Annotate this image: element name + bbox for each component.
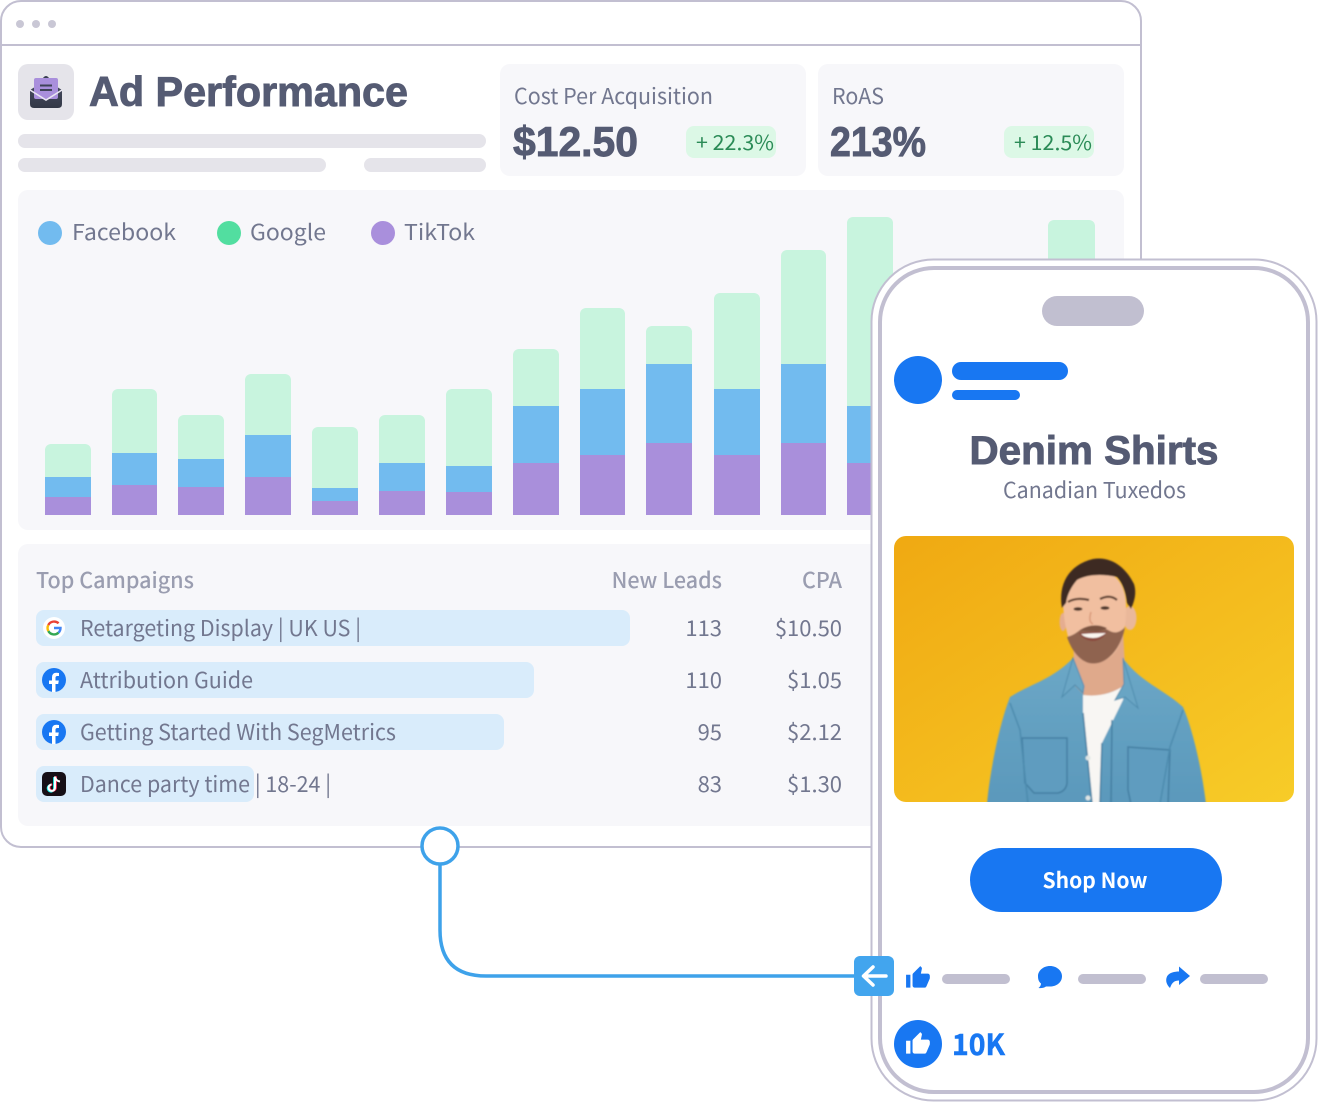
share placeholder [1200, 974, 1268, 984]
window controls [16, 20, 56, 28]
shop now button: Shop Now [1042, 865, 1148, 895]
icon: Facebook [42, 668, 66, 692]
t-shirt [1083, 685, 1125, 804]
like count badge [894, 1020, 1005, 1068]
panel: RoAS: + 12.5% [1014, 126, 1092, 156]
panel: cost per acquisition: Cost Per Acquisition [514, 79, 713, 111]
icon: Facebook [42, 720, 66, 744]
bars: Facebook [45, 364, 893, 501]
panel: cost per acquisition: $12.50 [513, 118, 638, 165]
icon: like [906, 966, 930, 988]
like count badge: 10K [952, 1022, 1005, 1064]
phone speaker pill [1042, 296, 1144, 326]
table header: Top Campaigns [36, 564, 194, 595]
title: Ad Performance [89, 68, 408, 115]
smile [1079, 632, 1107, 641]
row: Getting Started: 95 [698, 715, 722, 747]
icon: envelope [18, 64, 74, 120]
row: Getting Started: Getting Started With SegMetrics [80, 715, 396, 747]
ears [1124, 606, 1136, 630]
like placeholder [942, 974, 1010, 984]
ad account avatar and name lines [894, 356, 1068, 404]
table header: CPA [802, 564, 843, 595]
row: Attribution Guide: $1.05 [787, 663, 842, 695]
panel: RoAS [818, 64, 1124, 176]
pockets and seams [1022, 738, 1067, 793]
row: Getting Started [36, 714, 842, 750]
row: Attribution Guide: Attribution Guide [80, 663, 253, 695]
connector line [422, 828, 860, 976]
dashboard window [1, 1, 1141, 847]
ad heading: Denim Shirts [970, 429, 1218, 473]
hair [1061, 559, 1135, 609]
row: Dance party time: 83 [698, 767, 722, 799]
icon: TikTok [42, 772, 66, 796]
ad subheading: Canadian Tuxedos [1003, 473, 1186, 505]
panel: cost per acquisition: + 22.3% [696, 126, 774, 156]
panel: RoAS: 213% [830, 118, 926, 165]
icon: comment [1038, 966, 1062, 988]
table header: New Leads [612, 564, 722, 595]
comment placeholder [1078, 974, 1146, 984]
row: Attribution Guide: 110 [685, 663, 722, 695]
panel: top campaigns table [18, 544, 1124, 826]
chart legend [38, 215, 475, 247]
icon: share [1166, 966, 1190, 988]
ad photo: man in denim shirt [894, 536, 1294, 804]
face [1063, 571, 1126, 663]
icon: Google [43, 617, 65, 639]
shirt body [987, 658, 1206, 804]
row: Retargeting Display [36, 610, 842, 646]
chart legend: Facebook [72, 215, 176, 247]
shop now button [970, 848, 1222, 912]
collars [1062, 658, 1084, 697]
phone mockup [872, 260, 1316, 1100]
chart legend: Google [250, 215, 326, 247]
arrow button [854, 956, 894, 996]
panel: cost per acquisition [500, 64, 806, 176]
row: Getting Started: $2.12 [787, 715, 842, 747]
row: Retargeting Display: Retargeting Display | UK US | [80, 611, 361, 643]
row: Dance party time [36, 766, 842, 802]
beard [1067, 626, 1125, 664]
eyes and brows [1068, 597, 1117, 602]
bars: Google [45, 217, 1095, 488]
chart legend: TikTok [404, 215, 475, 247]
row: Attribution Guide [36, 662, 842, 698]
neck [1073, 630, 1126, 697]
row: Retargeting Display: $10.50 [775, 611, 842, 643]
row: Retargeting Display: 113 [685, 611, 722, 643]
bars: TikTok [45, 443, 893, 515]
panel: RoAS: RoAS [832, 79, 884, 111]
row: Dance party time: $1.30 [787, 767, 842, 799]
table header [36, 564, 843, 595]
panel: stacked bar chart [18, 190, 1124, 530]
placeholder description lines [18, 134, 486, 172]
row: Dance party time: Dance party time | 18-24 | [80, 767, 331, 799]
